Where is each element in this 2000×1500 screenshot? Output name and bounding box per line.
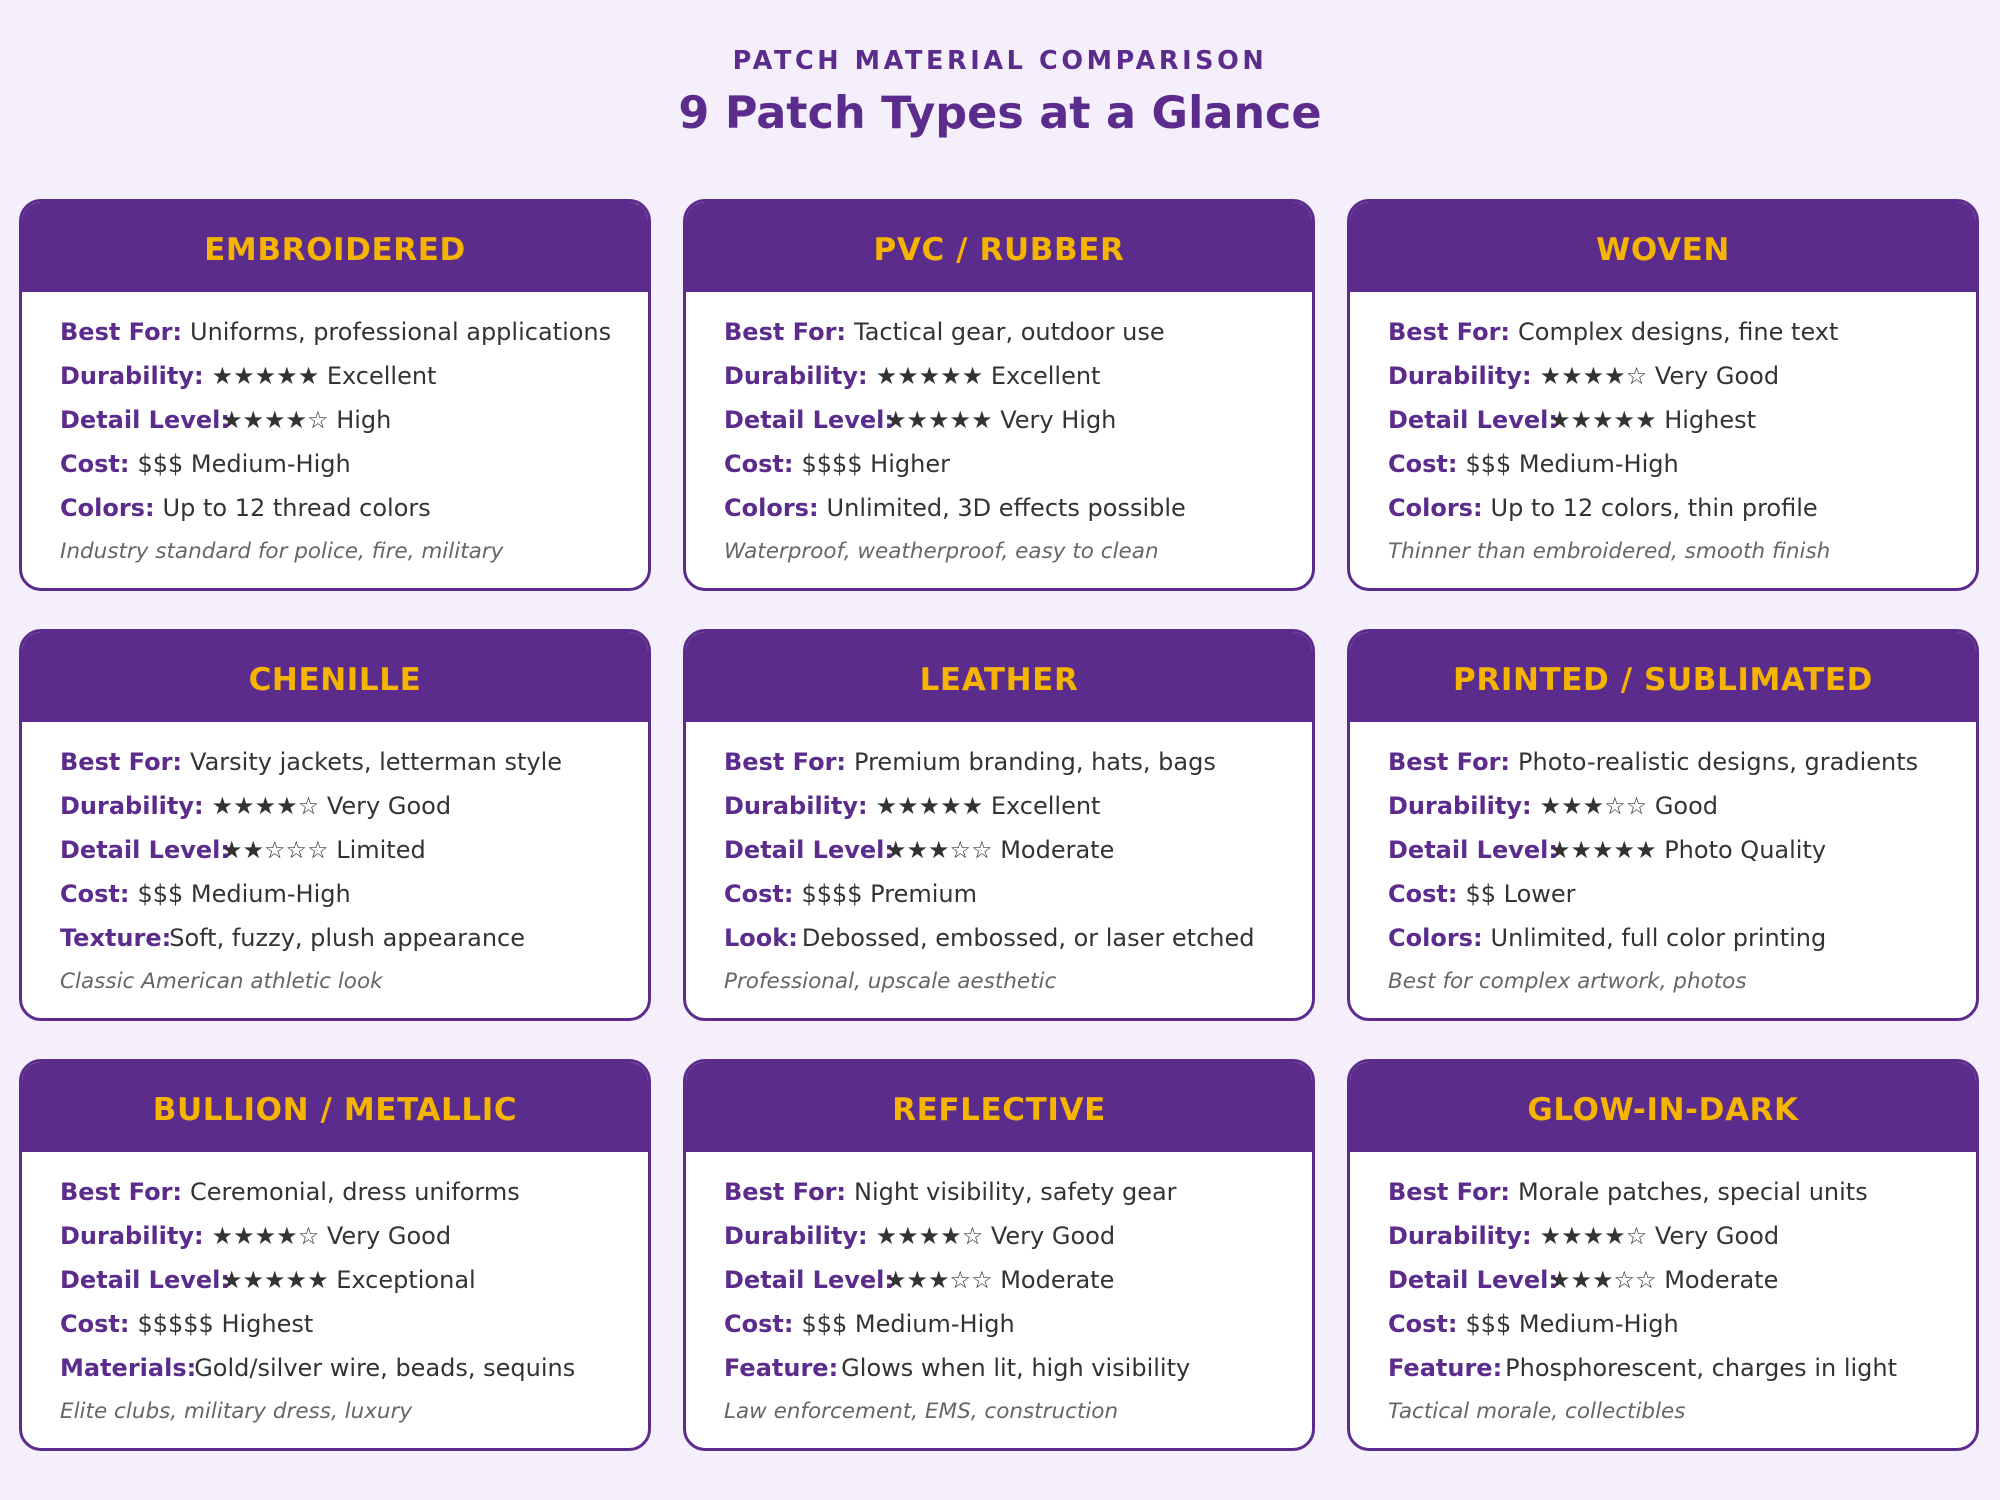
panel: embroidered: Best For: Uniforms, professional applications: [60, 318, 611, 346]
panel: leather: Durability: ★★★★★ Excellent: [724, 792, 1100, 820]
panel: glow: Durability: ★★★★☆ Very Good: [1388, 1222, 1779, 1250]
panel: pvc: [683, 199, 1315, 591]
panel: pvc: Detail Level:★★★★★ Very High: [724, 406, 1116, 434]
panel: woven: [1347, 199, 1979, 591]
subtitle: PATCH MATERIAL COMPARISON: [733, 46, 1267, 76]
panel: glow: Tactical morale, collectibles: [1388, 1399, 1685, 1424]
panel: reflective: [683, 1059, 1315, 1451]
panel: bullion: Durability: ★★★★☆ Very Good: [60, 1222, 451, 1250]
panel: printed: PRINTED / SUBLIMATED: [1453, 662, 1873, 698]
panel: printed: Detail Level:★★★★★ Photo Quality: [1388, 836, 1826, 864]
panel: leather: [683, 629, 1315, 1021]
panel: glow: Best For: Morale patches, special units: [1388, 1178, 1868, 1206]
panel: chenille: Durability: ★★★★☆ Very Good: [60, 792, 451, 820]
panel: embroidered: Cost: $$$ Medium-High: [60, 450, 351, 478]
panel: woven: Thinner than embroidered, smooth finish: [1388, 539, 1830, 564]
panel: chenille: [19, 629, 651, 1021]
panel: embroidered: [19, 199, 651, 591]
panel: woven: Durability: ★★★★☆ Very Good: [1388, 362, 1779, 390]
panel: reflective: REFLECTIVE: [892, 1092, 1106, 1128]
panel: leather: Look:Debossed, embossed, or laser etched: [724, 924, 1254, 952]
panel: reflective: Cost: $$$ Medium-High: [724, 1310, 1015, 1338]
panel: bullion: Elite clubs, military dress, luxury: [60, 1399, 412, 1424]
panel: reflective: Law enforcement, EMS, construction: [724, 1399, 1118, 1424]
panel: bullion: Materials:Gold/silver wire, beads, sequins: [60, 1354, 575, 1382]
panel: glow: Feature:Phosphorescent, charges in light: [1388, 1354, 1897, 1382]
panel: leather: LEATHER: [920, 662, 1078, 698]
panel: pvc: PVC / RUBBER: [874, 232, 1124, 268]
panel: embroidered: Detail Level:★★★★☆ High: [60, 406, 391, 434]
panel: woven: WOVEN: [1596, 232, 1730, 268]
panel: pvc: Cost: $$$$ Higher: [724, 450, 950, 478]
panel: reflective: Best For: Night visibility, safety gear: [724, 1178, 1177, 1206]
panel: leather: Cost: $$$$ Premium: [724, 880, 977, 908]
panel: pvc: Best For: Tactical gear, outdoor use: [724, 318, 1165, 346]
panel: woven: Colors: Up to 12 colors, thin profile: [1388, 494, 1818, 522]
panel: printed: Durability: ★★★☆☆ Good: [1388, 792, 1718, 820]
panel: pvc: Durability: ★★★★★ Excellent: [724, 362, 1100, 390]
panel: leather: Detail Level:★★★☆☆ Moderate: [724, 836, 1114, 864]
panel: embroidered: Colors: Up to 12 thread colors: [60, 494, 431, 522]
panel: chenille: Classic American athletic look: [60, 969, 383, 994]
panel: glow: Cost: $$$ Medium-High: [1388, 1310, 1679, 1338]
panel: reflective: Feature:Glows when lit, high visibility: [724, 1354, 1190, 1382]
panel: printed: Best For: Photo-realistic designs, gradients: [1388, 748, 1918, 776]
panel: leather: Best For: Premium branding, hats, bags: [724, 748, 1216, 776]
panel: bullion: Best For: Ceremonial, dress uniforms: [60, 1178, 520, 1206]
panel: bullion: [19, 1059, 651, 1451]
panel: chenille: Cost: $$$ Medium-High: [60, 880, 351, 908]
panel: woven: Cost: $$$ Medium-High: [1388, 450, 1679, 478]
panel: bullion: BULLION / METALLIC: [153, 1092, 517, 1128]
panel: pvc: Colors: Unlimited, 3D effects possible: [724, 494, 1186, 522]
panel: printed: Best for complex artwork, photos: [1388, 969, 1747, 994]
panel: printed: [1347, 629, 1979, 1021]
panel: bullion: Detail Level:★★★★★ Exceptional: [60, 1266, 476, 1294]
panel: glow: [1347, 1059, 1979, 1451]
panel: reflective: Detail Level:★★★☆☆ Moderate: [724, 1266, 1114, 1294]
panel: bullion: Cost: $$$$$ Highest: [60, 1310, 313, 1338]
panel: embroidered: Durability: ★★★★★ Excellent: [60, 362, 436, 390]
panel: chenille: CHENILLE: [249, 662, 421, 698]
panel: embroidered: Industry standard for police, fire, military: [60, 539, 503, 564]
panel: pvc: Waterproof, weatherproof, easy to clean: [724, 539, 1159, 564]
panel: woven: Best For: Complex designs, fine text: [1388, 318, 1838, 346]
panel: embroidered: EMBROIDERED: [204, 232, 466, 268]
panel: glow: GLOW-IN-DARK: [1527, 1092, 1799, 1128]
panel: woven: Detail Level:★★★★★ Highest: [1388, 406, 1756, 434]
panel: chenille: Detail Level:★★☆☆☆ Limited: [60, 836, 426, 864]
panel: leather: Professional, upscale aesthetic: [724, 969, 1056, 994]
panel: chenille: Texture:Soft, fuzzy, plush appearance: [60, 924, 525, 952]
panel: printed: Cost: $$ Lower: [1388, 880, 1576, 908]
panel: printed: Colors: Unlimited, full color printing: [1388, 924, 1826, 952]
panel: chenille: Best For: Varsity jackets, letterman style: [60, 748, 562, 776]
panel: reflective: Durability: ★★★★☆ Very Good: [724, 1222, 1115, 1250]
title: 9 Patch Types at a Glance: [678, 88, 1322, 139]
panel: glow: Detail Level:★★★☆☆ Moderate: [1388, 1266, 1778, 1294]
